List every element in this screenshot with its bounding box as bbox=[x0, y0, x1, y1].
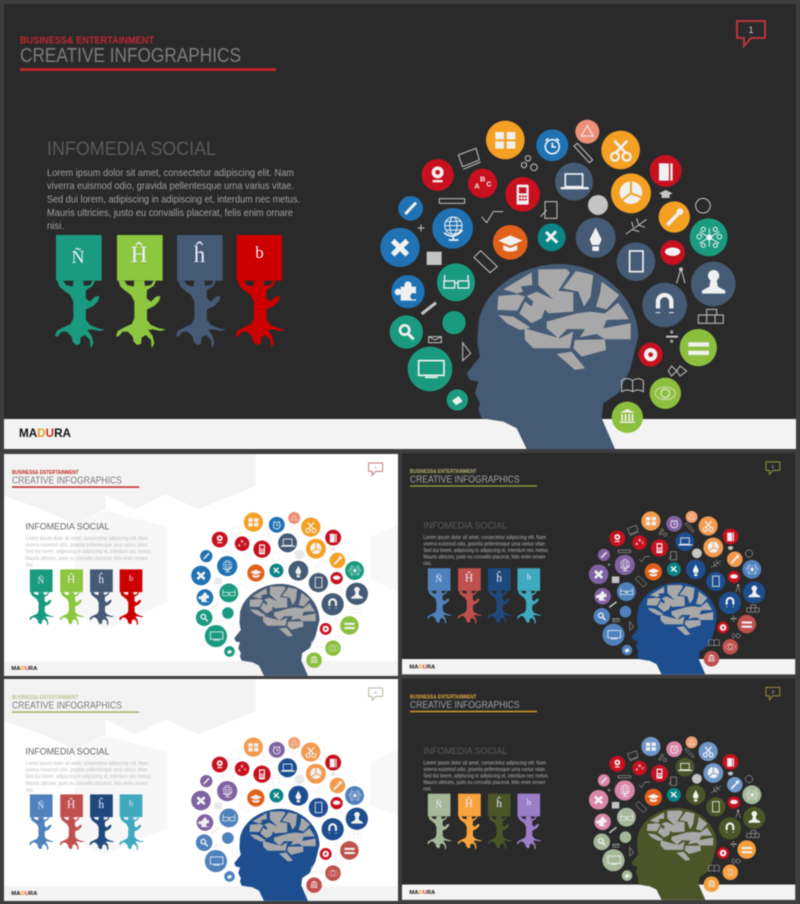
body text: Lorem ipsum dolor sit amet, consectetur adipiscing elit. Nam bbox=[423, 760, 546, 766]
icon: bank bbox=[612, 402, 643, 433]
icon: webcam bbox=[422, 159, 454, 191]
icon: alphabet letters: C bbox=[486, 180, 492, 189]
icon: notebook bbox=[650, 155, 682, 187]
tree sign letters: Ñ bbox=[436, 574, 443, 584]
head silhouette bbox=[467, 264, 638, 449]
icon: tools bbox=[538, 223, 566, 251]
tree sign letters: b bbox=[255, 243, 264, 262]
head and icon cloud illustration bbox=[191, 737, 368, 901]
body text: Sed dui lorem, adipiscing in adipiscing et, interdum nec metus. bbox=[423, 774, 549, 780]
icon: fountain pen bbox=[576, 218, 616, 258]
icon: puzzle bbox=[391, 275, 425, 308]
callout number icon: 3 bbox=[772, 689, 775, 694]
header title: CREATIVE INFOGRAPHICS bbox=[410, 700, 520, 711]
slide 1: large dark slide bbox=[4, 4, 796, 449]
tree sign letters: Ñ bbox=[436, 800, 443, 810]
body text: Mauris ultricies, justo eu convallis placerat, felis enim ornare bbox=[25, 781, 148, 787]
icon: alarm clock bbox=[536, 129, 568, 161]
background hexagons bbox=[4, 679, 398, 854]
body text: Sed dui lorem, adipiscing in adipiscing et, interdum nec metus. bbox=[423, 548, 549, 554]
icon: graduation cap bbox=[493, 225, 528, 260]
icon: magnet bbox=[642, 283, 687, 327]
tree sign letters: Ñ bbox=[38, 575, 45, 585]
body text: nisi. bbox=[25, 787, 34, 793]
icon: vision eye bbox=[650, 378, 681, 409]
body text: nisi. bbox=[25, 562, 34, 568]
tree sign letters: Ĥ bbox=[465, 571, 473, 585]
icon: network bbox=[690, 218, 728, 256]
icon: tablet bbox=[617, 242, 655, 281]
tree sign letters: ĥ bbox=[98, 797, 104, 811]
body text: Sed dui lorem, adipiscing in adipiscing et, interdum nec metus. bbox=[47, 194, 300, 206]
section heading: INFOMEDIA SOCIAL bbox=[423, 745, 507, 756]
footer logo: MADURA bbox=[11, 666, 37, 672]
icon: close cross bbox=[380, 228, 420, 267]
tree chart of four signs bbox=[55, 235, 285, 348]
body text: Lorem ipsum dolor sit amet, consectetur adipiscing elit. Nam bbox=[423, 535, 546, 541]
icon: person bbox=[691, 262, 736, 306]
callout number icon bbox=[369, 688, 383, 700]
icon: grid app bbox=[486, 121, 525, 159]
icon: monitor bbox=[408, 347, 452, 391]
tree sign letters: b bbox=[527, 572, 531, 582]
footer logo: MADURA bbox=[409, 664, 435, 670]
slide 4: light slide with blue theme bbox=[4, 679, 398, 901]
body text bbox=[25, 536, 151, 568]
header underline bbox=[410, 711, 537, 712]
body text: Mauris ultricies, justo eu convallis placerat, felis enim ornare bbox=[25, 556, 148, 562]
tree sign letters: b bbox=[129, 573, 133, 583]
head and icon cloud illustration bbox=[380, 120, 736, 449]
tree chart of four signs bbox=[29, 794, 144, 851]
callout number icon bbox=[766, 687, 780, 700]
section heading: INFOMEDIA SOCIAL bbox=[25, 522, 109, 533]
callout number icon: 1 bbox=[748, 25, 754, 35]
header title: CREATIVE INFOGRAPHICS bbox=[12, 700, 122, 711]
header subtitle: BUSINESS& ENTERTAINMENT bbox=[12, 695, 79, 701]
brain bbox=[497, 269, 631, 370]
tree sign letters: ĥ bbox=[194, 241, 206, 267]
header underline bbox=[12, 486, 139, 488]
body text: nisi. bbox=[47, 220, 64, 232]
callout number icon: 1 bbox=[772, 464, 775, 469]
footer logo: MADURA bbox=[19, 428, 71, 440]
header subtitle: BUSINESS& ENTERTAINMENT bbox=[12, 470, 79, 476]
body text: Sed dui lorem, adipiscing in adipiscing et, interdum nec metus. bbox=[25, 774, 151, 780]
icon: pie chart bbox=[611, 173, 651, 213]
icon: magnifier bbox=[390, 315, 423, 349]
body text bbox=[423, 535, 549, 567]
body text: viverra euismod odio, gravida pellentesque urna varius vitae. bbox=[423, 541, 546, 547]
header underline bbox=[410, 485, 537, 487]
icon: recycle bbox=[575, 120, 599, 144]
tree sign letters bbox=[72, 241, 264, 267]
tree sign letters bbox=[436, 571, 531, 585]
head and icon cloud illustration bbox=[589, 736, 765, 900]
icon: laptop bbox=[555, 163, 593, 201]
tree sign letters: Ĥ bbox=[131, 242, 147, 267]
header underline bbox=[12, 711, 139, 713]
tree sign letters: Ĥ bbox=[67, 572, 75, 586]
body text: viverra euismod odio, gravida pellentesque urna varius vitae. bbox=[25, 543, 148, 549]
footer logo: MADURA bbox=[11, 891, 37, 897]
body text bbox=[47, 167, 300, 232]
tree sign letters: Ĥ bbox=[67, 797, 75, 811]
icon: alphabet letters bbox=[468, 169, 497, 198]
body text bbox=[423, 760, 549, 793]
icon: red eye bbox=[639, 343, 663, 367]
body text: nisi. bbox=[423, 561, 432, 567]
body text: Lorem ipsum dolor sit amet, consectetur adipiscing elit. Nam bbox=[47, 167, 294, 179]
callout number icon: 1 bbox=[374, 465, 377, 470]
header title: CREATIVE INFOGRAPHICS bbox=[410, 474, 520, 485]
header title: CREATIVE INFOGRAPHICS bbox=[20, 45, 241, 67]
section heading: INFOMEDIA SOCIAL bbox=[47, 139, 216, 160]
header underline bbox=[20, 68, 276, 71]
footer logo: MADURA bbox=[409, 890, 435, 896]
section heading: INFOMEDIA SOCIAL bbox=[423, 519, 507, 530]
tree sign letters: b bbox=[129, 798, 133, 808]
tree sign letters bbox=[436, 796, 531, 810]
callout number icon bbox=[737, 21, 765, 46]
icon: lock bbox=[447, 389, 468, 411]
outline icons bbox=[418, 143, 723, 392]
icon: mobile phone bbox=[505, 177, 540, 212]
icon: apple bbox=[660, 240, 685, 265]
body text: Lorem ipsum dolor sit amet, consectetur adipiscing elit. Nam bbox=[25, 761, 148, 767]
icon: glasses bbox=[437, 263, 475, 301]
icon: equals bbox=[680, 329, 717, 366]
header subtitle: BUSINESS& ENTERTAINMENT bbox=[410, 469, 477, 475]
head and icon cloud illustration bbox=[191, 512, 368, 676]
icon: scissors bbox=[601, 131, 640, 169]
body text: Mauris ultricies, justo eu convallis placerat, felis enim ornare bbox=[423, 555, 546, 561]
body text: Lorem ipsum dolor sit amet, consectetur adipiscing elit. Nam bbox=[25, 536, 148, 542]
small filled outline icons bbox=[427, 190, 683, 271]
body text: viverra euismod odio, gravida pellentesque urna varius vitae. bbox=[423, 767, 546, 773]
icon: dropper bbox=[659, 201, 690, 233]
body text bbox=[25, 761, 151, 793]
icon: alphabet letters: A bbox=[474, 182, 480, 191]
tree chart of four signs bbox=[427, 568, 542, 624]
tree chart of four signs bbox=[427, 794, 542, 850]
body text: nisi. bbox=[423, 787, 432, 793]
tree sign letters: ĥ bbox=[496, 796, 502, 810]
tree sign letters: Ñ bbox=[72, 246, 84, 267]
body text: viverra euismod odio, gravida pellentesque urna varius vitae. bbox=[47, 180, 294, 192]
header subtitle: BUSINESS& ENTERTAINMENT bbox=[20, 34, 155, 46]
tree sign letters: ĥ bbox=[98, 572, 104, 586]
header subtitle: BUSINESS& ENTERTAINMENT bbox=[410, 695, 477, 701]
section heading: INFOMEDIA SOCIAL bbox=[25, 747, 109, 758]
tree sign 1 bbox=[55, 235, 105, 348]
body text: Mauris ultricies, justo eu convallis placerat, felis enim ornare bbox=[423, 780, 546, 786]
body text: Sed dui lorem, adipiscing in adipiscing et, interdum nec metus. bbox=[25, 549, 151, 555]
tree chart of four signs bbox=[29, 569, 144, 626]
body text: Mauris ultricies, justo eu convallis placerat, felis enim ornare bbox=[47, 207, 293, 219]
icon: pencil bbox=[398, 196, 423, 221]
slide 2: light slide with green and red trees bbox=[4, 454, 398, 676]
slide 3: dark slide with blue theme bbox=[402, 453, 795, 674]
tree sign letters: ĥ bbox=[496, 571, 502, 585]
body text: viverra euismod odio, gravida pellentesque urna varius vitae. bbox=[25, 768, 148, 774]
slide 5: dark slide with olive theme bbox=[402, 678, 795, 900]
tree sign letters: Ĥ bbox=[465, 796, 473, 810]
head and icon cloud illustration bbox=[589, 511, 765, 674]
tree sign 4 bbox=[235, 235, 285, 348]
tree sign letters: Ñ bbox=[38, 800, 45, 810]
callout number icon bbox=[369, 463, 383, 475]
header title: CREATIVE INFOGRAPHICS bbox=[12, 475, 122, 486]
tree sign letters bbox=[38, 797, 133, 811]
callout number icon: 4 bbox=[374, 690, 377, 695]
tree sign letters: b bbox=[527, 797, 531, 807]
callout number icon bbox=[766, 462, 780, 474]
icon: alphabet letters: B bbox=[480, 174, 485, 183]
tree sign 2 bbox=[116, 235, 166, 348]
tree sign letters bbox=[38, 572, 133, 586]
tree sign 3 bbox=[176, 235, 226, 348]
icon: plain circle bbox=[442, 311, 466, 334]
background hexagons bbox=[4, 454, 398, 629]
icon: globe bbox=[432, 208, 473, 249]
